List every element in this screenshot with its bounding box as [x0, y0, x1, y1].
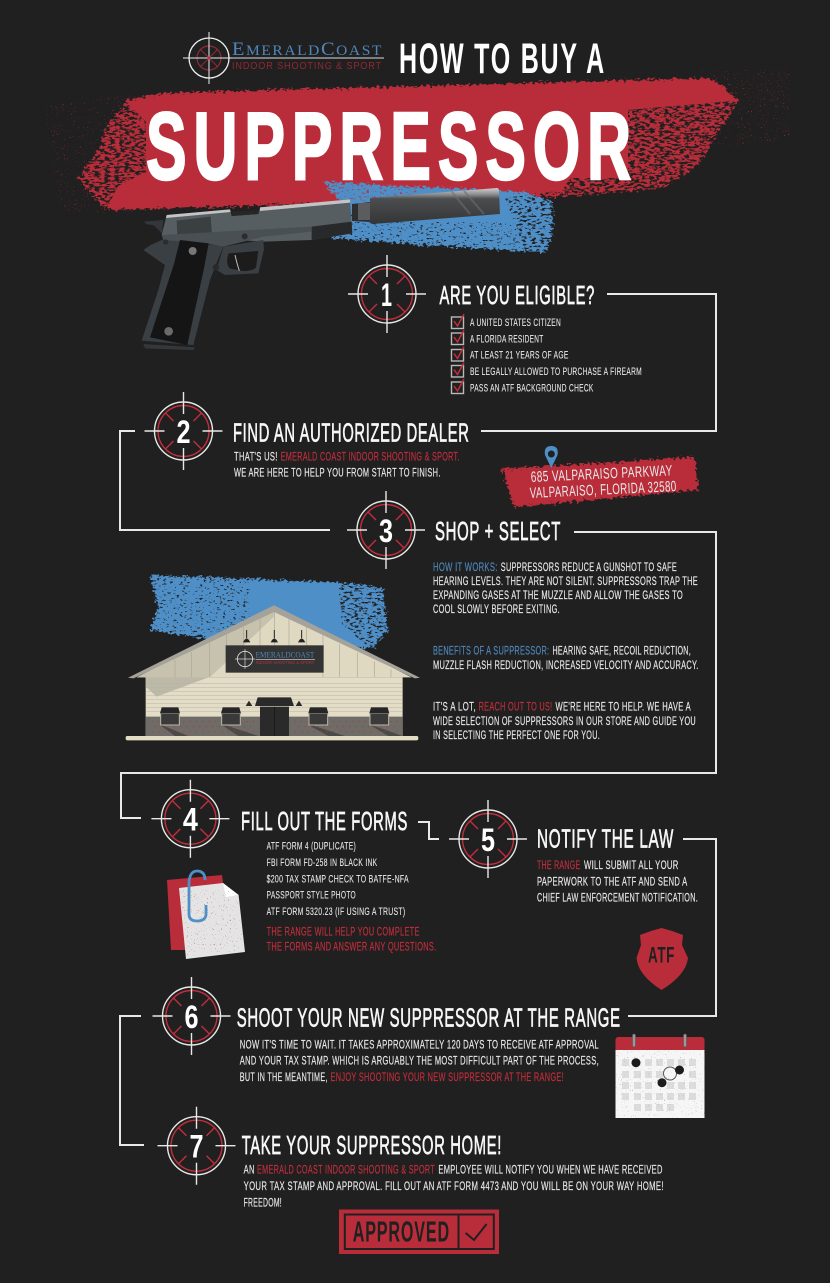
heading: FIND AN AUTHORIZED DEALER [233, 418, 470, 448]
text: how it works: COOL SLOWLY BEFORE EXITING. [433, 602, 560, 616]
body text: EMPLOYEE WILL NOTIFY YOU WHEN WE HAVE RECEIVED [438, 1163, 663, 1177]
text: reach out [433, 700, 696, 742]
red note: THE FORMS AND ANSWER ANY QUESTIONS. [267, 940, 436, 954]
checklist: BE LEGALLY ALLOWED TO PURCHASE A FIREARM [470, 366, 642, 378]
gable [137, 607, 412, 677]
step 1 eligibility [348, 255, 642, 395]
step 6 shoot [152, 977, 704, 1118]
building: EMERALDCOAST [256, 650, 315, 660]
connector line: steps 2 to 3 [120, 431, 330, 530]
text: how it works [433, 560, 698, 616]
crosshair number 2 [144, 392, 222, 470]
heading: TAKE YOUR SUPPRESSOR HOME! [242, 1130, 502, 1160]
body text [240, 1037, 599, 1084]
building [126, 606, 418, 740]
body text: AND YOUR TAX STAMP. WHICH IS ARGUABLY THE MOST DIFFICULT PART OF THE PROCESS, [240, 1054, 599, 1068]
text: reach out: REACH OUT TO US! [479, 700, 552, 714]
heading: how to buy a: HOW TO BUY A [399, 36, 606, 83]
icon: check mark [466, 1224, 487, 1240]
blue brush behind suppressor [323, 182, 560, 255]
checklist: AT LEAST 21 YEARS OF AGE [470, 350, 569, 362]
checklist: A UNITED STATES CITIZEN [470, 317, 561, 329]
body text: AN [244, 1163, 255, 1177]
text: reach out: IT'S A LOT, [433, 700, 476, 714]
forms list [267, 840, 409, 918]
connector line: steps 4 to 5 [418, 822, 439, 839]
address banner: VALPARAISO, FLORIDA 32580 [529, 478, 677, 502]
body text: EMERALD COAST INDOOR SHOOTING & SPORT [257, 1163, 435, 1177]
crosshair number 6 [152, 977, 230, 1055]
connector line: steps 3 to 4 [121, 532, 716, 818]
stone base [146, 717, 403, 736]
crosshair number 1 [348, 255, 426, 333]
connector line: steps 6 to 7 [120, 1016, 144, 1145]
crosshair number 2: 2 [176, 414, 190, 450]
logo wordmark: EMERALD COAST [232, 39, 383, 60]
building: INDOOR SHOOTING & SPORT [256, 660, 315, 665]
icon: paperclipped forms [167, 871, 245, 959]
forms list: ATF FORM 4 (DUPLICATE) [267, 840, 356, 852]
crosshair number 5 [449, 800, 527, 878]
body text: EMERALD COAST INDOOR SHOOTING & SPORT. [281, 450, 460, 464]
body text: FREEDOM! [244, 1195, 282, 1209]
checklist: A FLORIDA RESIDENT [470, 333, 544, 345]
store illustration [126, 570, 418, 740]
body text: BUT IN THE MEANTIME, [240, 1070, 328, 1084]
body text: PAPERWORK TO THE ATF AND SEND A [537, 875, 688, 889]
forms list: PASSPORT STYLE PHOTO [267, 890, 356, 902]
approved stamp: APPROVED [353, 1217, 450, 1249]
address banner: 685 VALPARAISO PARKWAY [530, 462, 673, 486]
text: how it works: HOW IT WORKS: [433, 560, 498, 574]
body text: THAT'S US! [234, 450, 278, 464]
connector line: steps 1 to 2 [481, 294, 716, 431]
crosshair number 7 [158, 1107, 236, 1185]
crosshair number 4 [151, 780, 229, 858]
body text: THE RANGE [537, 858, 580, 872]
text: benefits: HEARING SAFE, RECOIL REDUCTION, [552, 644, 691, 658]
step 7 take home [158, 1107, 664, 1254]
suppressor can [352, 188, 500, 224]
sign [226, 645, 324, 673]
heading: FILL OUT THE FORMS [241, 806, 408, 836]
forms list: $200 TAX STAMP CHECK TO BATFE-NFA [267, 873, 409, 885]
text: how it works: SUPPRESSORS REDUCE A GUNSHOT TO SAFE [501, 560, 677, 574]
icon: ATF badge [636, 928, 688, 990]
forms list: ATF FORM 5320.23 (IF USING A TRUST) [267, 906, 406, 918]
connector line: steps 5 to 6 [628, 839, 716, 1016]
body text: ENJOY SHOOTING YOUR NEW SUPPRESSOR AT THE RANGE! [330, 1070, 564, 1084]
approved stamp [339, 1210, 499, 1254]
icon: ATF badge: ATF [648, 943, 675, 968]
step 3 shop and select [126, 491, 699, 742]
crosshair number 3 [347, 491, 425, 569]
text: benefits [433, 644, 699, 672]
foundation [126, 736, 418, 740]
logo crosshair [183, 32, 235, 84]
body text: NOW IT'S TIME TO WAIT. IT TAKES APPROXIMATELY 120 DAYS TO RECEIVE ATF APPROVAL [240, 1037, 599, 1051]
text: benefits: BENEFITS OF A SUPPRESSOR: [433, 644, 549, 658]
roof [130, 606, 418, 678]
body text: WILL SUBMIT ALL YOUR [584, 858, 679, 872]
step 2 dealer [144, 392, 698, 507]
heading: SHOP + SELECT [435, 516, 561, 546]
body text: WE ARE HERE TO HELP YOU FROM START TO FINISH. [234, 466, 441, 480]
step 5 notify [449, 800, 698, 990]
body text [234, 450, 460, 480]
crosshair number 7: 7 [190, 1129, 204, 1165]
text: reach out: IN SELECTING THE PERFECT ONE FOR YOU. [433, 728, 600, 742]
crosshair number 6: 6 [184, 999, 198, 1035]
door [260, 707, 289, 736]
logo [183, 32, 384, 84]
text: how it works: EXPANDING GASES AT THE MUZZLE AND ALLOW THE GASES TO [433, 588, 683, 602]
checklist [452, 314, 642, 395]
heading: ARE YOU ELIGIBLE? [440, 280, 595, 310]
pistol body [142, 199, 352, 350]
address banner [502, 446, 698, 507]
text: reach out: WE'RE HERE TO HELP. WE HAVE A [556, 700, 691, 714]
crosshair number 3: 3 [379, 513, 393, 549]
icon: map pin [545, 446, 558, 468]
red note [267, 925, 436, 954]
blue brush [145, 570, 395, 652]
red note: THE RANGE WILL HELP YOU COMPLETE [267, 925, 420, 939]
body text [244, 1163, 664, 1209]
red brush banner [45, 70, 790, 215]
crosshair number 5: 5 [481, 822, 495, 858]
crosshair number 4: 4 [183, 802, 198, 838]
wall [146, 677, 403, 736]
body text: CHIEF LAW ENFORCEMENT NOTIFICATION. [537, 891, 698, 905]
step 4 forms [151, 780, 436, 959]
suppressor pistol [142, 188, 500, 350]
body text [537, 858, 698, 905]
windows [161, 713, 389, 725]
forms list: FBI FORM FD-258 IN BLACK INK [267, 857, 378, 869]
checklist: PASS AN ATF BACKGROUND CHECK [470, 383, 594, 395]
crosshair number 1: 1 [381, 277, 392, 313]
lamps [247, 630, 302, 638]
heading: NOTIFY THE LAW [537, 824, 674, 854]
icon: calendar [616, 1034, 704, 1118]
logo tagline: INDOOR SHOOTING & SPORT [232, 60, 382, 72]
